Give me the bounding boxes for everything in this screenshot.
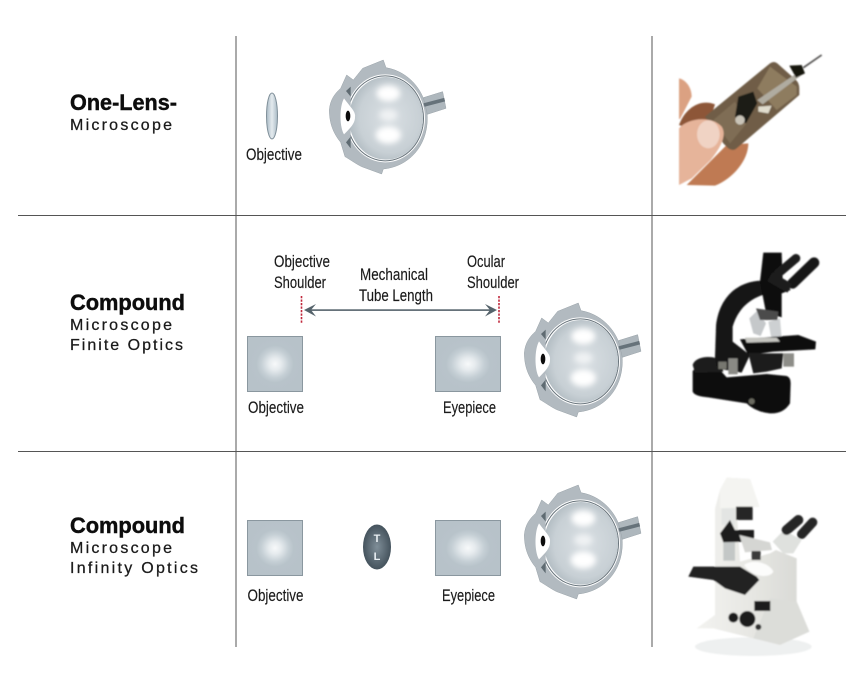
marker: ocular shoulder dashed line	[498, 296, 500, 323]
icon: tube lens TL	[363, 524, 391, 570]
label: Mechanical Tube Length	[359, 266, 433, 305]
label: Objective Shoulder: Objective	[274, 253, 330, 271]
icon: objective lens (finite)	[248, 336, 302, 392]
icon: tube lens TL: T	[374, 533, 381, 545]
icon: eye (infinity)	[524, 485, 641, 599]
heading: One-Lens Microscope	[70, 90, 177, 134]
stage	[740, 335, 816, 355]
arrow: mechanical tube length	[304, 304, 497, 316]
label: Eyepiece (finite): Eyepiece	[443, 399, 496, 417]
plate body	[705, 62, 799, 150]
label: Objective (finite): Objective	[248, 399, 304, 417]
base	[693, 369, 791, 413]
label: Objective (one-lens): Objective	[246, 146, 302, 164]
icon: eyepiece lens (finite)	[436, 336, 500, 392]
label: Mechanical Tube Length: Mechanical	[360, 266, 428, 284]
heading: One-Lens Microscope: Microscope	[70, 117, 172, 134]
skin: lower palm	[687, 143, 748, 186]
icon: objective lens (infinity)	[248, 520, 302, 576]
icon: eye (finite)	[524, 303, 641, 417]
icon: tube lens TL: L	[374, 551, 381, 563]
skin: thumb	[679, 119, 724, 185]
heading: Compound Microscope Finite Optics	[70, 290, 185, 354]
marker: objective shoulder dashed line	[300, 296, 302, 323]
main white body	[697, 478, 809, 645]
heading: Compound Microscope Finite Optics: Compound	[70, 290, 185, 315]
icon: eye (one-lens)	[329, 60, 446, 174]
icon: eyepiece lens (infinity)	[436, 520, 500, 576]
heading: Compound Microscope Infinity Optics: Infinity Optics	[70, 560, 198, 577]
heading: Compound Microscope Finite Optics: Microscope	[70, 317, 172, 334]
label: Objective Shoulder: Shoulder	[274, 274, 326, 292]
photo: hand holding single-lens microscope	[679, 55, 822, 186]
label: Ocular Shoulder: Shoulder	[467, 274, 519, 292]
skin: finger behind plate	[679, 103, 715, 127]
objectives	[749, 311, 766, 336]
label: Objective Shoulder	[274, 253, 330, 292]
head and tube	[760, 253, 791, 317]
arm	[715, 281, 766, 373]
label: Mechanical Tube Length: Tube Length	[359, 287, 433, 305]
skin: index fingertip	[679, 78, 692, 119]
photo: infinity optics inverted microscope	[688, 478, 813, 656]
photo: finite optics compound microscope	[693, 253, 816, 413]
label: Ocular Shoulder: Ocular	[467, 253, 505, 271]
icon: single lens	[266, 93, 278, 139]
heading: Compound Microscope Finite Optics: Finite Optics	[70, 337, 183, 354]
heading: One-Lens Microscope: One-Lens-	[70, 90, 177, 115]
heading: Compound Microscope Infinity Optics: Microscope	[70, 540, 172, 557]
heading: Compound Microscope Infinity Optics	[70, 513, 198, 577]
label: Eyepiece (infinity): Eyepiece	[442, 587, 495, 605]
label: Objective (infinity): Objective	[248, 587, 304, 605]
label: Ocular Shoulder	[467, 253, 519, 292]
heading: Compound Microscope Infinity Optics: Compound	[70, 513, 185, 538]
